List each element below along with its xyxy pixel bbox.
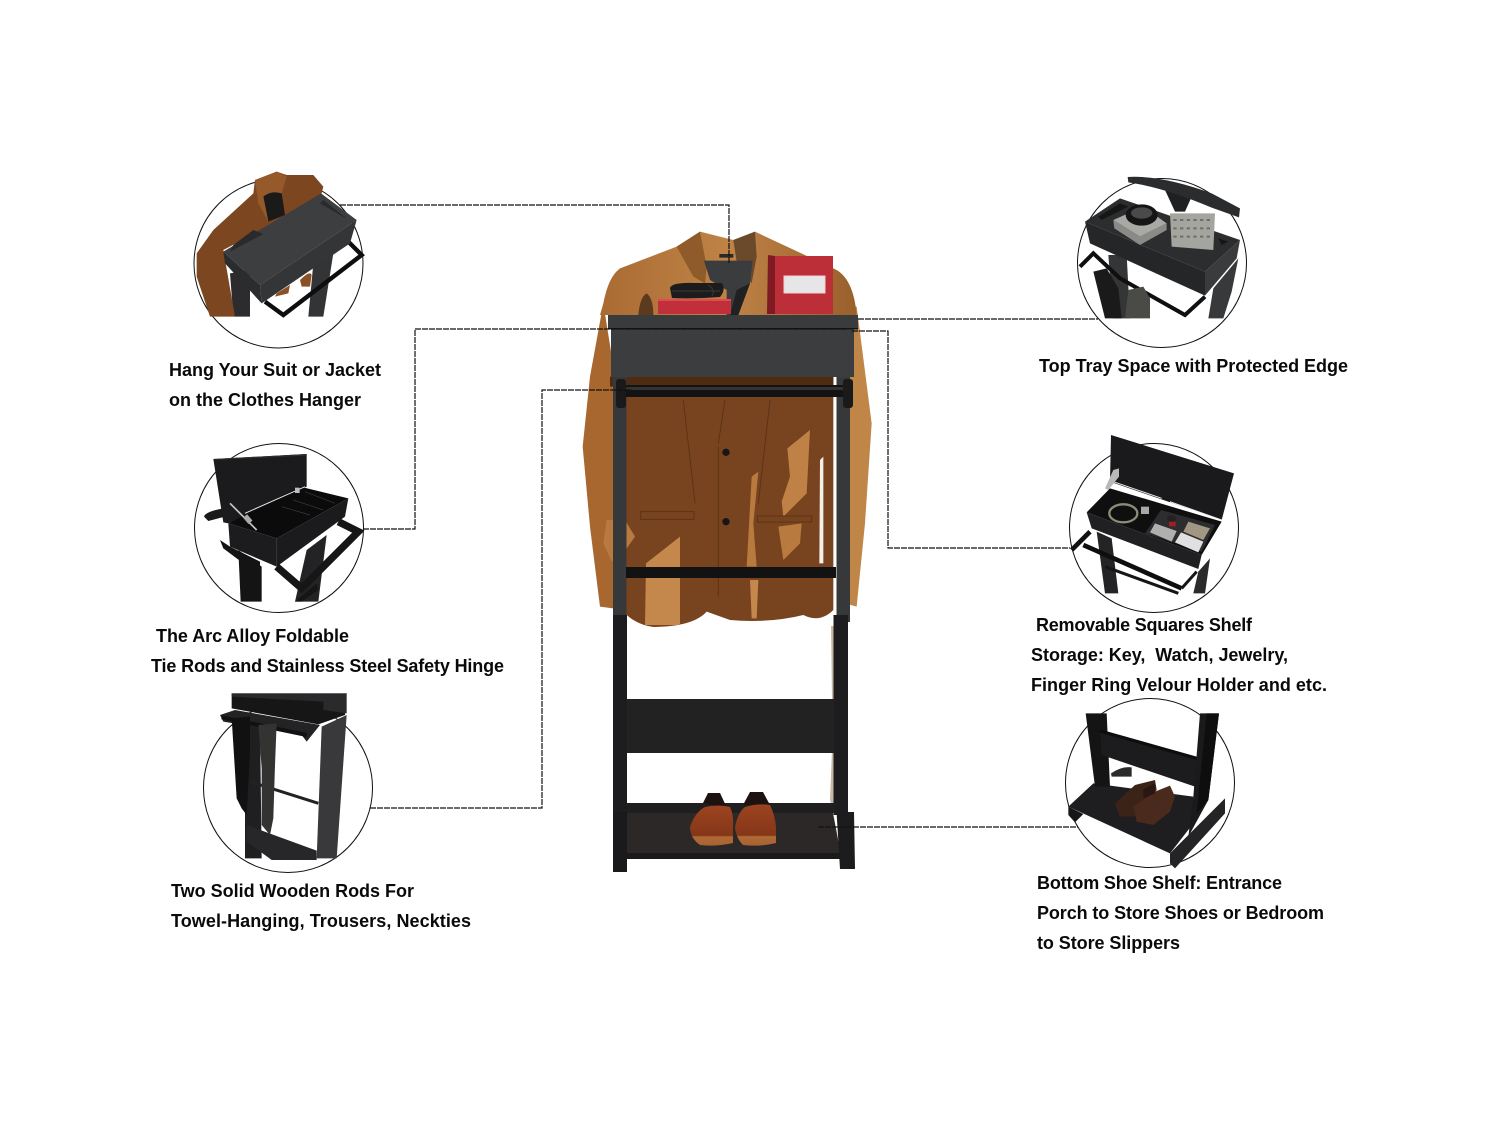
caption: arc alloy tie rods: Tie Rods and Stainless Steel Safety Hinge [151, 656, 504, 676]
belt [670, 283, 724, 298]
leader line: top tray [858, 318, 1098, 320]
caption: hang your suit: Hang Your Suit or Jacket [169, 360, 381, 380]
callout: clothes hanger detail [194, 172, 363, 348]
callout: removable shelf detail [1070, 435, 1238, 612]
caption: removable shelf [1031, 615, 1327, 695]
caption: bottom shoe shelf: Bottom Shoe Shelf: Entrance [1037, 873, 1282, 893]
jacket [583, 232, 872, 627]
caption: removable shelf: Finger Ring Velour Holder and etc. [1031, 675, 1327, 695]
callout: shoe shelf detail [1066, 698, 1234, 868]
caption: removable shelf: Storage: Key, Watch, Jewelry, [1031, 645, 1288, 665]
caption: bottom shoe shelf [1037, 873, 1324, 953]
caption: wooden rods: Two Solid Wooden Rods For [171, 881, 414, 901]
caption: removable shelf: Removable Squares Shelf [1036, 615, 1253, 635]
caption: arc alloy tie rods [151, 626, 504, 676]
leader line: clothes hanger [340, 205, 729, 263]
caption: wooden rods: Towel-Hanging, Trousers, Neckties [171, 911, 471, 931]
shoe shelf [613, 803, 855, 872]
shoes [690, 792, 776, 846]
leader line: alloy tie rods [363, 329, 846, 529]
hanger neck panel [704, 254, 753, 315]
middle rod [626, 567, 836, 578]
leader line: wooden rods [370, 390, 632, 808]
top tray [608, 315, 858, 377]
red tall box [767, 255, 833, 314]
top rod [616, 379, 853, 408]
callout: hinge detail [194, 444, 364, 612]
caption: arc alloy tie rods: The Arc Alloy Foldable [156, 626, 349, 646]
caption: hang your suit [169, 360, 381, 410]
caption: top tray: Top Tray Space with Protected Edge [1039, 356, 1348, 376]
leader line: removable shelf [852, 331, 1070, 548]
callout: wooden rods detail [204, 693, 372, 872]
buttons [722, 449, 730, 525]
red flat box [658, 299, 731, 314]
caption: wooden rods [171, 881, 471, 931]
leader line: shoe shelf [818, 826, 1078, 828]
caption: bottom shoe shelf: Porch to Store Shoes or Bedroom [1037, 903, 1324, 923]
main product: valet stand with jacket [583, 232, 872, 872]
frame legs [613, 377, 850, 815]
callout: top tray detail [1078, 177, 1246, 348]
caption: hang your suit: on the Clothes Hanger [169, 390, 361, 410]
caption: bottom shoe shelf: to Store Slippers [1037, 933, 1180, 953]
lower panel [627, 699, 834, 753]
